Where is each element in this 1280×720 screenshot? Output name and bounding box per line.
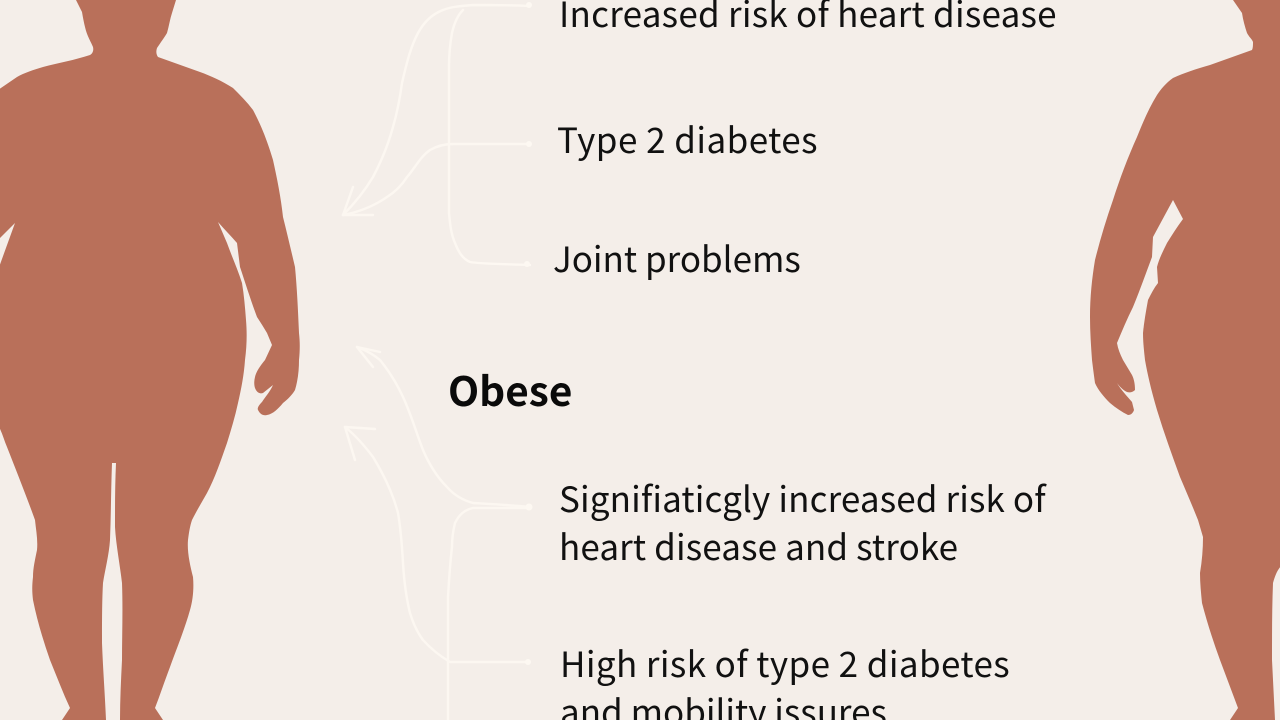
text: heart disease and stroke: Signifiaticgly increased risk of xyxy=(559,472,1046,523)
arrow end dots xyxy=(524,2,532,665)
connector arrows: obese xyxy=(345,347,530,720)
text: joint problems: Joint problems xyxy=(553,232,801,283)
text: heart disease and stroke: heart disease and stroke xyxy=(559,520,958,571)
left body silhouette xyxy=(0,0,300,720)
connector arrows: overweight xyxy=(343,5,530,265)
heading: obese: Obese xyxy=(448,359,572,418)
text: type 2 diabetes: Type 2 diabetes xyxy=(557,113,818,164)
text: diabetes and mobility xyxy=(560,637,1010,720)
right body silhouette xyxy=(1090,0,1280,720)
text: diabetes and mobility: High risk of type 2 diabetes xyxy=(560,637,1010,688)
text: heart disease and stroke xyxy=(559,472,1047,571)
